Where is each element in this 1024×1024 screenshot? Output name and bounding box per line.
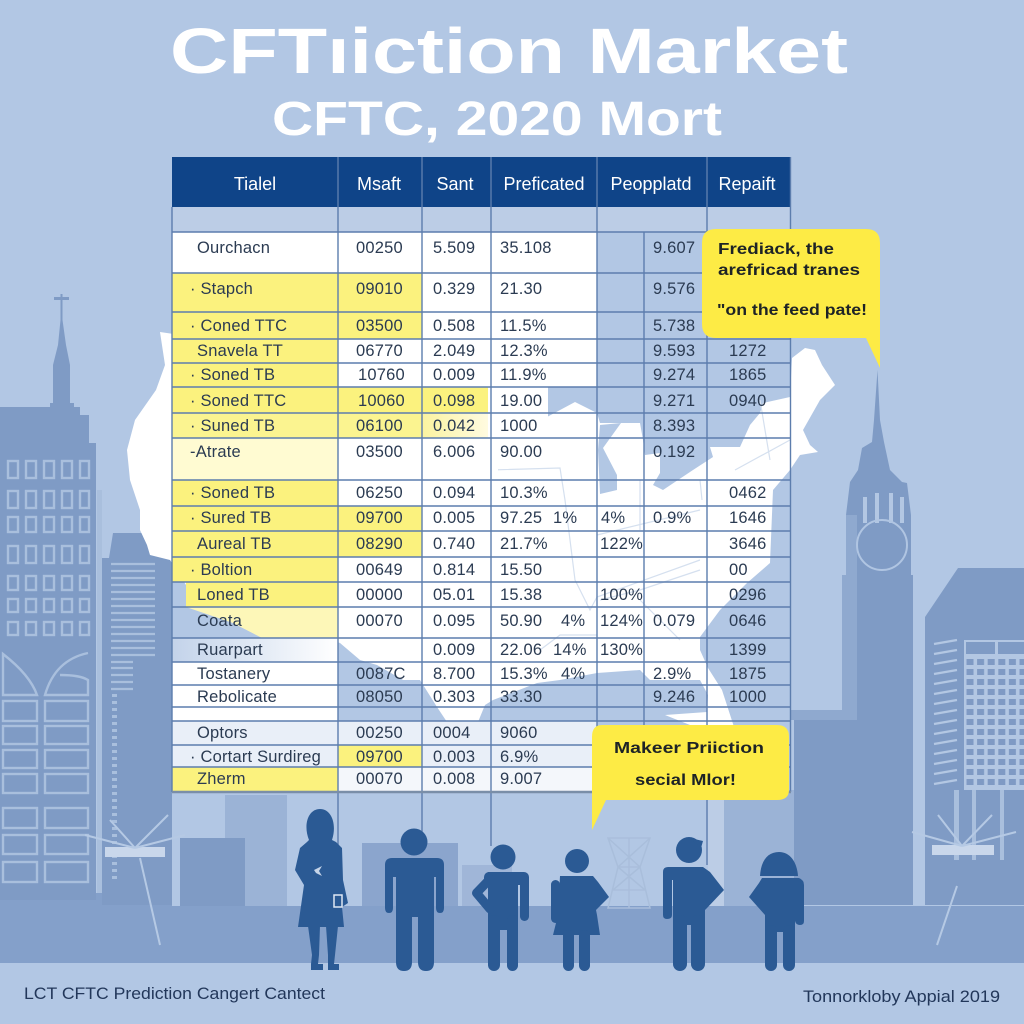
table rows: 00250 [356,239,403,257]
table rows: 1000 [729,688,767,706]
table rows: 4% [561,665,585,683]
table [172,157,791,865]
table rows: 0646 [729,612,767,630]
table rows: 35.108 [500,239,552,257]
table rows: 4% [561,612,585,630]
table rows: 05.01 [433,586,475,604]
table rows: 124% [600,612,643,630]
table rows: 9.593 [653,342,695,360]
table rows: 1% [553,509,577,527]
map of the United States [127,332,835,730]
table rows: 1000 [500,417,538,435]
table rows: 0.9% [653,509,692,527]
table rows: · Cortart Surdireg [190,748,321,766]
table rows: 0.192 [653,443,695,461]
table header: Preficated [503,174,585,194]
callout: bottom right: secial Mlor! [635,772,736,789]
table rows: Tostanery [197,665,271,683]
ground band [0,963,1024,1024]
table rows: 0.079 [653,612,695,630]
table rows: Ourchacn [197,239,270,257]
person 3 [476,844,529,971]
table rows: 10760 [358,366,405,384]
table rows: 97.25 [500,509,542,527]
table rows: 0.003 [433,748,475,766]
table rows: 10060 [358,392,405,410]
skyline: right clock tower [790,370,913,905]
table rows: 1875 [729,665,767,683]
table rows: Rebolicate [197,688,277,706]
table rows: 9.246 [653,688,695,706]
table rows: 2.049 [433,342,475,360]
table rows: 130% [600,641,643,659]
table rows: 0.005 [433,509,475,527]
table rows: 11.9% [500,366,547,384]
table rows: 21.30 [500,280,542,298]
table rows: 0.095 [433,612,475,630]
table rows: 0087C [356,665,406,683]
table rows: · Stapch [190,280,253,298]
table rows: 0296 [729,586,767,604]
table rows: 21.7% [500,535,548,553]
callout: bottom right: Makeer Priiction [614,740,764,757]
table rows: · Boltion [190,561,252,579]
table rows: 12.3% [500,342,548,360]
person 5 [663,837,724,971]
table rows: 2.9% [653,665,692,683]
table rows: 19.00 [500,392,542,410]
table rows: · Soned TTC [190,392,286,410]
skyline: left tower [0,294,102,900]
table rows: 09700 [356,748,403,766]
table rows: 00000 [356,586,403,604]
table rows: 5.738 [653,317,695,335]
skyline: right building [925,568,1024,905]
callout: top right [702,229,880,368]
table rows: 9.274 [653,366,695,384]
table header: Tialel [234,174,276,194]
table rows: 03500 [356,317,403,335]
person 1 [295,809,348,970]
table header [172,157,791,207]
table rows: 100% [600,586,643,604]
table rows: 50.90 [500,612,542,630]
table rows: 8.393 [653,417,695,435]
table rows: 0.009 [433,366,475,384]
table rows: Snavela TT [197,342,283,360]
table rows: 15.50 [500,561,542,579]
table rows: 0004 [433,724,471,742]
table rows: 1272 [729,342,767,360]
callout: top right: "on the feed pate! [717,302,867,319]
table rows: 08290 [356,535,403,553]
table rows: 0.098 [433,392,475,410]
table rows: 03500 [356,443,403,461]
table rows: -Atrate [190,443,241,461]
callout: top right: arefricad tranes [718,262,860,279]
table rows [190,239,767,788]
table rows: 1865 [729,366,767,384]
table rows: 9060 [500,724,538,742]
footer left text: LCT CFTC Prediction Cangert Cantect [24,984,325,1003]
footer right text: Tonnorkloby Appial 2019 [803,987,1000,1006]
table rows: · Soned TB [190,484,275,502]
table rows: 33.30 [500,688,542,706]
table rows: 00070 [356,612,403,630]
table rows: 00250 [356,724,403,742]
table rows: · Soned TB [190,366,275,384]
table rows: 00070 [356,770,403,788]
subtitle: CFTC, 2020 Mort [272,93,722,146]
person 6 [749,852,804,971]
Lake Michigan [598,423,621,494]
table rows: 15.3% [500,665,548,683]
person 2 [385,828,444,971]
table rows: · Coned TTC [190,317,287,335]
table rows: 1646 [729,509,767,527]
table rows: 06100 [356,417,403,435]
table rows: 0.508 [433,317,475,335]
table rows: 0940 [729,392,767,410]
table rows: · Suned TB [190,417,275,435]
person 4 [551,849,609,971]
table rows: 10.3% [500,484,548,502]
table grid [172,157,791,865]
table rows: 15.38 [500,586,542,604]
table rows: 11.5% [500,317,547,335]
callout: bottom right [592,725,789,830]
table rows: · Sured TB [190,509,271,527]
table rows: Optors [197,724,248,742]
table rows: 90.00 [500,443,542,461]
table rows: 0.740 [433,535,475,553]
table rows: Coata [197,612,243,630]
table rows: 00 [729,561,748,579]
table cell fills [172,207,791,792]
table rows: 0.009 [433,641,475,659]
table rows: 0.814 [433,561,475,579]
table rows: 0.042 [433,417,475,435]
icon: transmission tower [608,838,650,908]
table rows: 9.576 [653,280,695,298]
table header: Repaift [718,174,776,194]
table header: Msaft [357,174,401,194]
table rows: 0.008 [433,770,475,788]
table rows: 9.007 [500,770,542,788]
table header: Sant [436,174,474,194]
icon: right antenna [912,815,1016,945]
table rows: 0.303 [433,688,475,706]
table rows: 06250 [356,484,403,502]
table header: Peopplatd [610,174,692,194]
table rows: Loned TB [197,586,270,604]
title: CFTıiction Market [170,15,848,87]
table rows: 08050 [356,688,403,706]
table rows: 09700 [356,509,403,527]
table rows: 0.329 [433,280,475,298]
table rows: 22.06 [500,641,542,659]
table rows: Aureal TB [197,535,272,553]
table rows: 14% [553,641,587,659]
table rows: 9.607 [653,239,695,257]
people silhouettes [295,809,804,971]
table rows: 06770 [356,342,403,360]
table rows: 1399 [729,641,767,659]
table rows: 3646 [729,535,767,553]
table rows: 6.006 [433,443,475,461]
table rows: 6.9% [500,748,539,766]
table rows: 8.700 [433,665,475,683]
table rows: 9.271 [653,392,695,410]
table rows: 09010 [356,280,403,298]
table rows: Zherm [197,770,246,788]
table rows: Ruarpart [197,641,263,659]
icon: left antenna [85,815,185,945]
table rows: 4% [601,509,625,527]
skyline: left second building [102,533,172,905]
skyline: background blocks [0,790,1024,963]
table rows: 5.509 [433,239,475,257]
table rows: 0462 [729,484,767,502]
table rows: 122% [600,535,643,553]
callout: top right: Frediack, the [718,241,834,258]
table rows: 0.094 [433,484,475,502]
table rows: 00649 [356,561,403,579]
